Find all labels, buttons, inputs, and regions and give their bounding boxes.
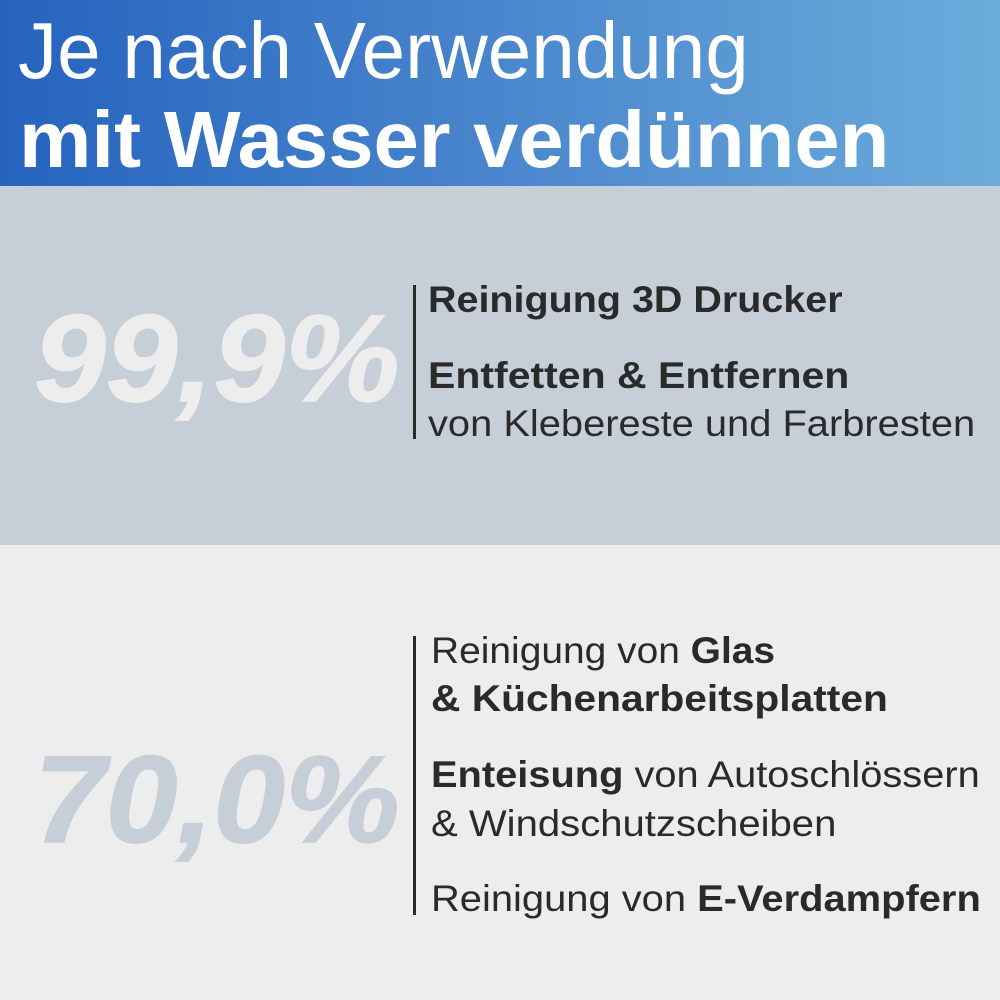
divider line — [413, 285, 416, 439]
use: de-icing: Enteisung von Autoschlössern — [431, 754, 980, 795]
use: glass and worktops: & Küchenarbeitsplatten — [431, 678, 888, 719]
use: 3D printer cleaning: Reinigung 3D Drucker — [428, 279, 843, 320]
use: glass and worktops — [431, 630, 888, 719]
title line 2: mit Wasser verdünnen — [19, 95, 889, 184]
title line 1: Je nach Verwendung — [18, 6, 749, 95]
use: degreasing and removing: Entfetten & Entfernen — [428, 355, 849, 396]
panel: 99,9% — [0, 186, 1000, 545]
use: degreasing and removing — [428, 355, 975, 444]
use: e-vaporisers: Reinigung von E-Verdampfern — [431, 878, 981, 919]
use: degreasing and removing: von Klebereste und Farbresten — [428, 403, 975, 444]
percentage 70,0%: 70,0% — [34, 731, 400, 869]
percentage 99,9%: 99,9% — [34, 290, 400, 428]
use: glass and worktops: Reinigung von Glas — [431, 630, 775, 671]
header banner — [0, 0, 1000, 186]
use: de-icing — [431, 754, 980, 844]
divider line — [413, 636, 416, 915]
panel: 70,0% — [0, 545, 1000, 1000]
use: de-icing: & Windschutzscheiben — [431, 803, 836, 844]
